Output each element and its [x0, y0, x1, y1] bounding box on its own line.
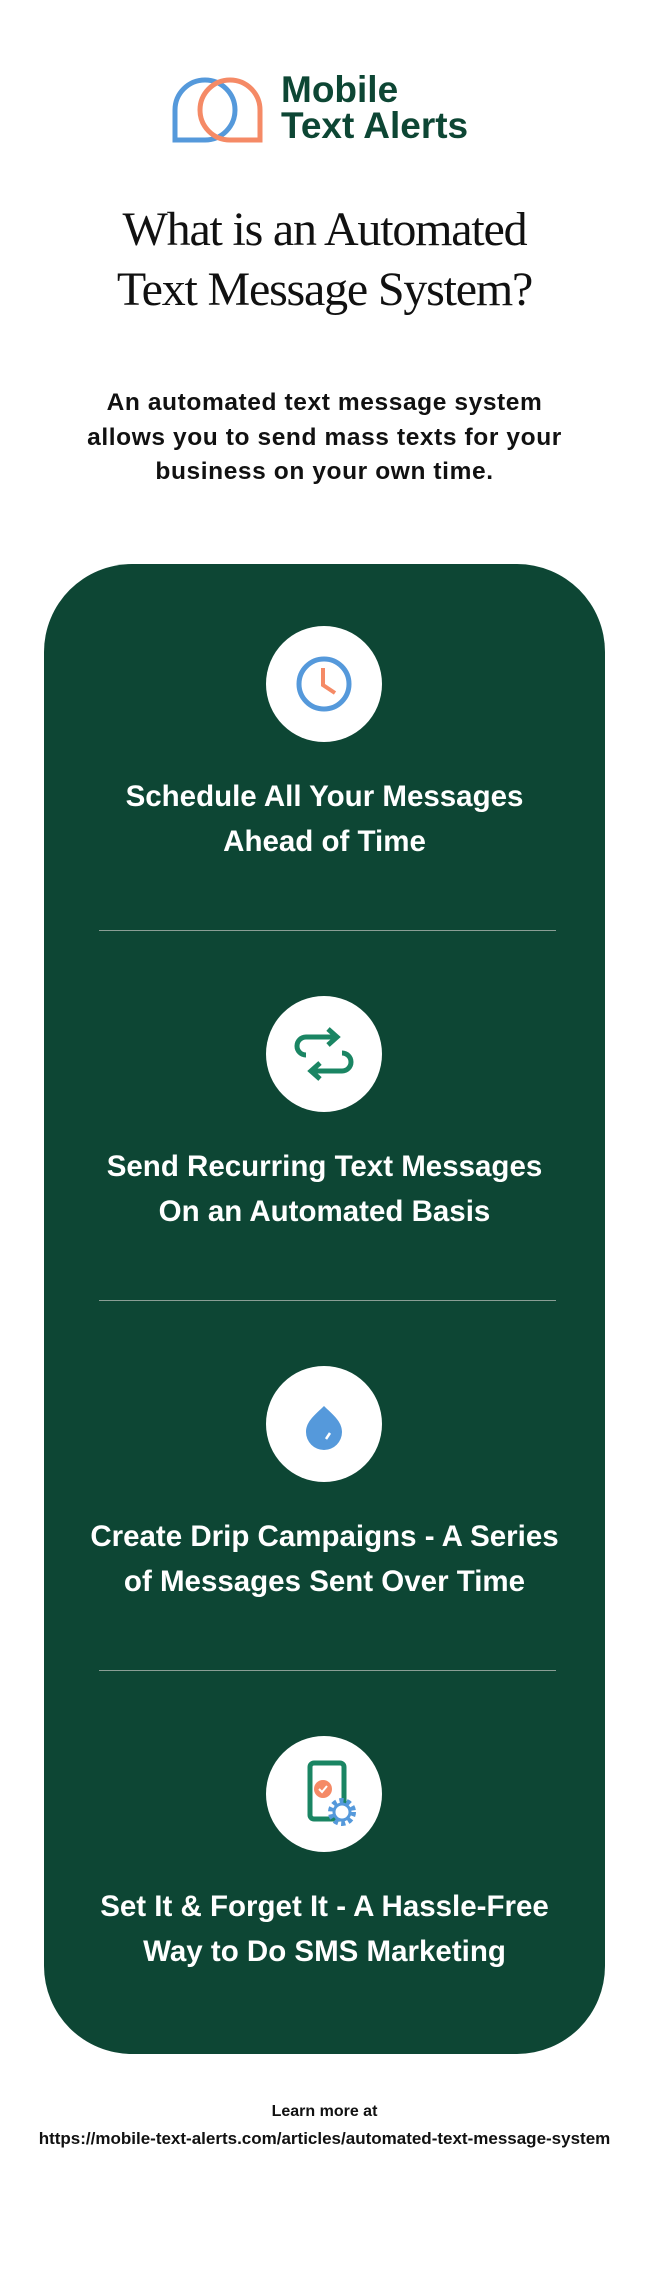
heading: set and forget: Way to Do SMS Marketing [143, 1935, 506, 1968]
footer: https://mobile-text-alerts.com/articles/automated-text-message-system [39, 2129, 610, 2148]
icon: drop [266, 1366, 382, 1482]
heading: recurring: On an Automated Basis [159, 1195, 490, 1228]
subtitle [87, 389, 562, 485]
icon: clock [266, 626, 382, 742]
subtitle: An automated text message system [107, 389, 542, 416]
heading: drip: Create Drip Campaigns - A Series [90, 1520, 559, 1553]
logo [172, 69, 468, 146]
logo text: Text Alerts [281, 105, 468, 146]
title [117, 203, 532, 316]
logo text: Mobile [281, 69, 398, 110]
footer: Learn more at [272, 2103, 377, 2120]
logo text [281, 69, 468, 146]
panel: features [44, 564, 605, 2054]
icon: phone gear [266, 1736, 382, 1852]
heading: set and forget: Set It & Forget It - A Hassle-Free [100, 1890, 549, 1923]
heading: schedule: Ahead of Time [223, 825, 426, 858]
title: Text Message System? [117, 263, 532, 316]
heading: drip: of Messages Sent Over Time [124, 1565, 525, 1598]
footer [39, 2103, 610, 2148]
subtitle: allows you to send mass texts for your [87, 424, 562, 450]
heading: schedule: Schedule All Your Messages [126, 780, 523, 813]
heading: drip [90, 1520, 559, 1598]
heading: set and forget [100, 1890, 549, 1968]
logo mark [172, 78, 262, 142]
icon: repeat [266, 996, 382, 1112]
heading: recurring: Send Recurring Text Messages [107, 1150, 542, 1183]
heading: recurring [107, 1150, 542, 1228]
title: What is an Automated [123, 203, 526, 256]
subtitle: business on your own time. [155, 458, 494, 485]
heading: schedule [126, 780, 523, 858]
